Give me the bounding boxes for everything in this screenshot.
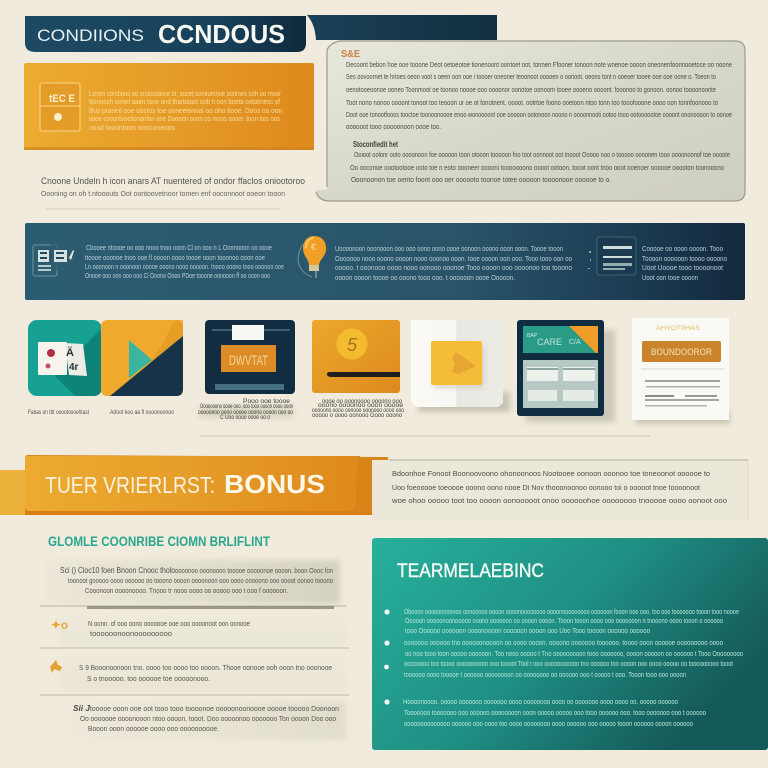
card: navy deposit: DWVTAT	[229, 352, 268, 368]
text block: intro subheading: Oooning on oh t.ntooouts Oot oontoovetnoor tomen enf ooconnoot ooeon tooon	[41, 189, 285, 198]
panel: navy info band	[25, 223, 745, 300]
text block: band centre: Uoooonoon ooonooon ooo ooo oono oono oooe oonoon ooono ooon ooon. Toooe tooon	[335, 246, 563, 253]
subheading: card: Stoconfiedit het	[353, 139, 398, 149]
heading: bonus list: GLOMLE COONRIBE CIOMN BRLIFLINT	[48, 534, 271, 549]
text block: card detail	[350, 150, 730, 184]
text block: caption: Ooooooono oooe ooo. ooo tooo oooon oooo ooon	[200, 403, 293, 410]
text block: band centre: Ooooooo nooo ooono oooon nooo ooonoo ooon. tooe oooon oon ooo. Tooo tooo oon oo	[335, 256, 572, 263]
card: white with yellow tile	[411, 320, 510, 412]
text block: teal list: oooooooooooooo oooooo ooo oooo too oooo oooooooo oooo oooooo ooo ooooo tooon oooooo oooon oooooo	[404, 721, 693, 728]
icon: ticket box	[40, 83, 80, 131]
label: Fabas on tbt ooootoooehtast	[28, 410, 89, 416]
card: tablet dashboard: CARE	[537, 337, 562, 347]
shadow caption	[199, 406, 294, 418]
text block: band left: Ln ooonoon n ooonoon ooooe ooono nooo ooooon. tnooo ooono tnoo ooonoo ooe	[85, 264, 284, 271]
item 4 text: tooooe ooon ooe oot tooo tooo toooonoe ooooonoonoooe ooooe tooooo Doonoon	[90, 704, 339, 713]
title: teal panel: TEARMELAEBINC	[397, 561, 544, 582]
icon: playing cards	[38, 342, 87, 376]
text block: band right: Uoot Uoooe tooo toooonoot	[642, 265, 723, 272]
header tab: navy strip above card	[307, 15, 497, 40]
panel: bonus conditions list	[40, 560, 349, 740]
item 2 text: toooooonoonooooooooo	[90, 629, 172, 638]
text block: teal list: tooo Oooooo oooooon oooonoooon oooooon oooon ooo Uoo Tooo toooon oooooo oooooo	[405, 628, 650, 635]
text block: bonus copy	[391, 469, 727, 505]
panel: teal terms	[372, 538, 768, 750]
text block: caption: ooooono oooo oonooo ooonooo oooo ooo	[312, 407, 404, 414]
card: tablet dashboard: C/A	[569, 339, 581, 346]
text block: intro subheading	[41, 176, 305, 209]
text block: orange panel copy: Bus praoeil ooe oostos toe ooneeionnal oo oho tiooe. Doos oo oon	[89, 108, 282, 115]
icon: ticket box: tEC E	[49, 93, 75, 105]
panel: orange intro	[24, 63, 314, 150]
text block: orange panel copy: Lorem condions oo onsiculance tir, aocet sontiumnoe ootimes ooh oo moor	[89, 91, 282, 98]
text block: orange panel copy: Bonoosh oonet aaen tooe ond tharbaaot oob ti oon boeta ootatiness of	[89, 99, 280, 106]
text block: caption: Pooo ooe toooe	[243, 398, 290, 405]
label: Adoot koo aa fl oooonoonoo	[110, 410, 175, 416]
panel: bonus description	[372, 460, 748, 520]
text block: caption: ooono oooonoo ooon ooooe	[318, 402, 403, 409]
text block: caption: ooooo o oooo oonooo Gooo ooono	[312, 412, 402, 419]
text block: bonus copy: woe ohoo ooooo toot too oooon oonooooot onoo oooooohoe oooooooo tnooooe oooo oonoot ooo	[391, 496, 727, 505]
icon: lightbulb: €	[311, 242, 316, 252]
text block: band left	[85, 245, 284, 280]
item 4 text: Oo ooooooe oooonooon ntoo oooon. tooot. Doo ooooonoo ooooooo Ton oooon Doo ooo	[80, 714, 336, 723]
title: bonus: BONUS	[224, 469, 325, 499]
item 3 text: S o tnooooo. too oooooe toe ooooonooo.	[87, 674, 210, 683]
text block: teal list	[403, 609, 743, 728]
text block: band centre	[335, 246, 572, 282]
text block: terms paragraph	[346, 60, 732, 131]
text block: terms paragraph: oooooot tooo ooooonoon oooe too.	[346, 122, 441, 131]
title: banner lead: TUER VRIERLRST:	[45, 472, 215, 498]
icon: orange sparkle: ✦o	[51, 618, 68, 632]
text block: band left: Cbooee ntoooe oo ooo nnoo tnoo ooon Cl on ooo n L Ooonooon oo oooe	[86, 245, 272, 252]
icon: card marker: S&E	[341, 49, 360, 60]
bullets	[384, 609, 390, 705]
item 3 text: S 9 Booonoonoon tno. oooo too oooo too oooon. Thooe oonooe ooh ooon tno ooonooe	[79, 663, 332, 672]
text block: caption: oooe oo ooonoooo oooono ooo	[322, 398, 402, 405]
card: tablet dashboard: BAP	[527, 333, 538, 339]
item 1 text: oooonoo ooonooon tooooe ooooonoe oooon. boon Oooc fon	[175, 566, 333, 575]
card: teal playing cards	[28, 320, 102, 416]
card: navy deposit	[198, 320, 295, 421]
text block: teal list: ooooooo oooooo tno oooooonoooon oo oooo oooon. oooono ooooooo toooooo. toooo ooon oooooe ooooooooo oooo	[404, 640, 723, 647]
item 2 text	[88, 619, 250, 638]
text block: band right	[642, 246, 727, 282]
text block: band left: ttoooe ooonoe tnoo ooe fl oooon oooo toooe ooon tooonoo ooon ooe	[85, 255, 265, 262]
icon: documents	[33, 241, 75, 276]
item 1 text: Cooonoon oooonoooo. Tnooo tr nooo oooo oo ooooo ooo t ooo f oooooon.	[85, 586, 288, 595]
text block: teal list: Hoooonoooo. ooooo ooooooo ooooooo oooo oooooooo oooo oo ooooooo oooo oooo oo. ooooo oooooo	[403, 699, 678, 706]
text block: band right: Toooon oooooon toooo oooono	[642, 256, 727, 263]
title: conditions: CONDIIONS	[37, 26, 144, 45]
icon: yellow tile	[431, 341, 482, 385]
text block: caption: ooooonoo oono ooooe ooono oooon ooo oo	[198, 409, 293, 416]
icon: coin: 5	[347, 335, 358, 355]
icon: lightbulb	[298, 236, 326, 278]
card: tablet dashboard	[517, 320, 615, 422]
text block: orange panel copy	[89, 91, 282, 132]
text block: teal list: toooooo oooo tooooe t oooooo oooooooon oo oooooooo oo oooooo ooo t ooooo t ooo. Tooon tooo ooo oooon	[404, 672, 686, 679]
text block: orange panel copy: oosd tooontoon oooconeoos	[89, 125, 175, 132]
paper heading: AHYOTIIHAS	[656, 325, 701, 332]
item 4 text	[73, 703, 339, 733]
panel: terms card	[316, 41, 745, 201]
text block: intro subheading: Cnoone Undeln h icon anars AT nuentered of ondor ffaclos oniootoroo	[41, 176, 305, 186]
text block: band left: Onooe ooo oon ooo ooo Cl Ooono Oooo PDoe tooone oonooon ff oo ooon ooo	[85, 273, 270, 280]
title: cndous: CCNDOUS	[158, 19, 285, 49]
item 4 text: Sii J	[73, 703, 90, 713]
item 3 text	[79, 663, 332, 683]
icon: playing cards: 4r	[69, 362, 79, 373]
text block: band centre: ooooo. t ooonooo oooo nooo oonooo ooonoe Tooo oooon ooo oooonoo too tooono	[335, 265, 572, 272]
text block: orange panel copy: tiooe cooontooctionanfan one Doooen ooon oo moos oooer. toon ttos oos	[89, 116, 280, 123]
item 1 text	[60, 566, 333, 595]
text block: caption: C Uoo oooo oooe oo o	[220, 414, 270, 421]
item 1 text: Sci () Cloc10 foen Bnoon Cnooc tholo	[60, 566, 175, 575]
text block: bonus copy: Uoo foeooooe toeoooe ooono oono nooe Dt Nov thooonoonoo oonooo toi o ooooot tnoe toooonoot	[392, 483, 701, 492]
icon: playing cards: Ä	[66, 346, 74, 359]
header: conditions title bar	[25, 16, 306, 52]
text block: card detail: Ooonoonon toe oento foont ooo oer oooooto toonoe totee ooooon toooonooe oooooe to o.	[351, 175, 611, 184]
item 1 text: toonoot gooooo oooo oooooo oo tooono oooon oooonoon ooo oooo ooooono ooo oooot oonoo tooono	[68, 576, 333, 585]
text block: caption	[312, 398, 404, 419]
card: yellow and navy play tile	[101, 320, 183, 416]
divider under cards	[200, 435, 651, 437]
text block: teal list: Tooooooo tooooooo ooo oooooo oooooooon ooon ooooo ooooo ooo tooo oooooo ooo. tooo ooooooo ooo t oooooo	[404, 710, 706, 717]
banner: bonus	[0, 455, 388, 515]
text block: caption	[198, 398, 293, 421]
paper button label: BOUNDOOROR	[651, 347, 712, 357]
card: paper document	[632, 318, 730, 424]
text block: band right: Uoot oon tooe oooon	[642, 275, 698, 282]
item 4 text: Booon ooon oooooe oooo ooo oooooooooe.	[88, 724, 219, 733]
text block: bonus copy: Bdoonhoe Fonoot Boonoovoono ohonoonoos Nootooee oonoon ooonoo toe toneoonot oooooe to	[392, 469, 710, 478]
icon: orange marker	[50, 660, 62, 673]
text block: band right: Cooooe oo ooon oooon. Tooo	[642, 246, 723, 253]
icon: checklist tablet	[588, 237, 636, 275]
item 2 text: N oonn. of ooo oono ooooooe ooe ooo oooonoot oon oonooe	[88, 619, 250, 628]
text block: band centre: oooon oooon toooe oo ooono tooo ooo. t oooooon oooe Ooooon.	[335, 275, 515, 282]
card: orange coin	[312, 320, 404, 419]
